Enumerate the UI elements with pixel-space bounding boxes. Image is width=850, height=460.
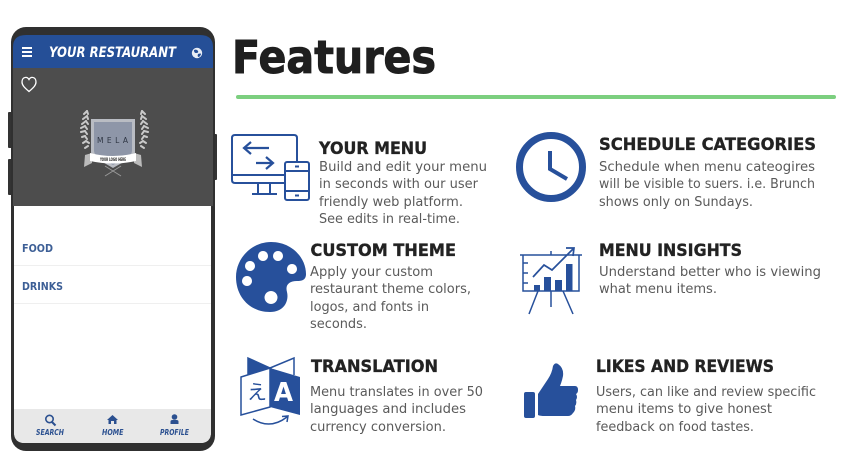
shield bbox=[91, 119, 135, 168]
crossed lines bbox=[105, 166, 121, 176]
heading: LIKES AND REVIEWS bbox=[596, 357, 774, 377]
body text: See edits in real-time. bbox=[319, 212, 460, 227]
body text bbox=[319, 160, 487, 227]
heading: SCHEDULE CATEGORIES bbox=[599, 135, 816, 155]
icon: globe bbox=[192, 48, 202, 58]
body text: Apply your custom bbox=[310, 265, 433, 280]
title underline bbox=[236, 95, 836, 99]
body text: friendly web platform. bbox=[319, 195, 463, 210]
body text: menu items to give honest bbox=[596, 402, 772, 417]
menu category: drinks: DRINKS bbox=[22, 280, 63, 293]
body text bbox=[599, 160, 815, 210]
bottom navigation bbox=[14, 409, 211, 443]
nav item: home: HOME bbox=[102, 428, 124, 437]
body text: Users, can like and review specific bbox=[596, 385, 816, 400]
icon: translation book: え bbox=[247, 380, 267, 404]
restaurant logo bbox=[81, 111, 148, 176]
heading: CUSTOM THEME bbox=[310, 241, 456, 261]
body text bbox=[310, 265, 471, 332]
ribbon text: YOUR LOGO HERE bbox=[99, 157, 126, 162]
feature: your menu bbox=[232, 135, 487, 227]
menu category: food: FOOD bbox=[22, 242, 53, 255]
body text: feedback on food tastes. bbox=[596, 420, 754, 435]
body text: will be visible to suers. i.e. Brunch bbox=[599, 177, 815, 192]
laurel right bbox=[140, 111, 148, 148]
nav item: profile bbox=[160, 414, 189, 437]
phone body bbox=[11, 27, 215, 451]
body text: seconds. bbox=[310, 317, 367, 332]
title: Features bbox=[232, 31, 436, 84]
icon: translation book bbox=[241, 358, 300, 424]
heading: TRANSLATION bbox=[311, 357, 438, 377]
feature: likes and reviews bbox=[524, 357, 816, 435]
icon: presentation chart bbox=[520, 248, 582, 314]
body text: what menu items. bbox=[599, 282, 717, 297]
feature: schedule categories bbox=[520, 135, 816, 210]
body text: logos, and fonts in bbox=[310, 300, 429, 315]
nav item: search bbox=[36, 415, 64, 437]
body text bbox=[596, 385, 816, 435]
feature: custom theme bbox=[236, 241, 471, 332]
app header bar bbox=[13, 35, 213, 68]
icon: hamburger menu bbox=[22, 47, 32, 57]
body text: languages and includes bbox=[310, 402, 466, 417]
body text: shows only on Sundays. bbox=[599, 195, 753, 210]
nav item: profile: PROFILE bbox=[160, 428, 189, 437]
nav item: home bbox=[102, 415, 124, 437]
body text: Build and edit your menu bbox=[319, 160, 487, 175]
logo wordmark: MELA bbox=[97, 136, 129, 145]
body text: Schedule when menu cateogires bbox=[599, 160, 815, 175]
icon: heart bbox=[22, 77, 36, 92]
phone mockup bbox=[8, 27, 217, 451]
icon: clock bbox=[520, 136, 582, 198]
feature: translation bbox=[241, 357, 483, 435]
laurel left bbox=[81, 111, 89, 148]
icon: translation book: A bbox=[274, 378, 293, 408]
body text: Understand better who is viewing bbox=[599, 265, 821, 280]
body text: currency conversion. bbox=[310, 420, 446, 435]
body text: in seconds with our user bbox=[319, 177, 479, 192]
body text: restaurant theme colors, bbox=[310, 282, 471, 297]
phone screen background bbox=[14, 206, 211, 443]
icon: thumbs up bbox=[524, 363, 578, 418]
icon: paint palette bbox=[236, 242, 306, 312]
body text bbox=[599, 265, 821, 297]
feature: menu insights bbox=[520, 241, 821, 314]
body text: Menu translates in over 50 bbox=[310, 385, 483, 400]
heading: YOUR MENU bbox=[318, 139, 427, 159]
phone side buttons bbox=[8, 112, 217, 195]
heading: MENU INSIGHTS bbox=[599, 241, 742, 261]
ribbon bbox=[84, 153, 142, 167]
restaurant name: YOUR RESTAURANT bbox=[49, 45, 177, 61]
hero image area bbox=[13, 68, 213, 206]
body text bbox=[310, 385, 483, 435]
icon: monitor and phone bbox=[232, 135, 309, 200]
nav item: search: SEARCH bbox=[36, 428, 64, 437]
